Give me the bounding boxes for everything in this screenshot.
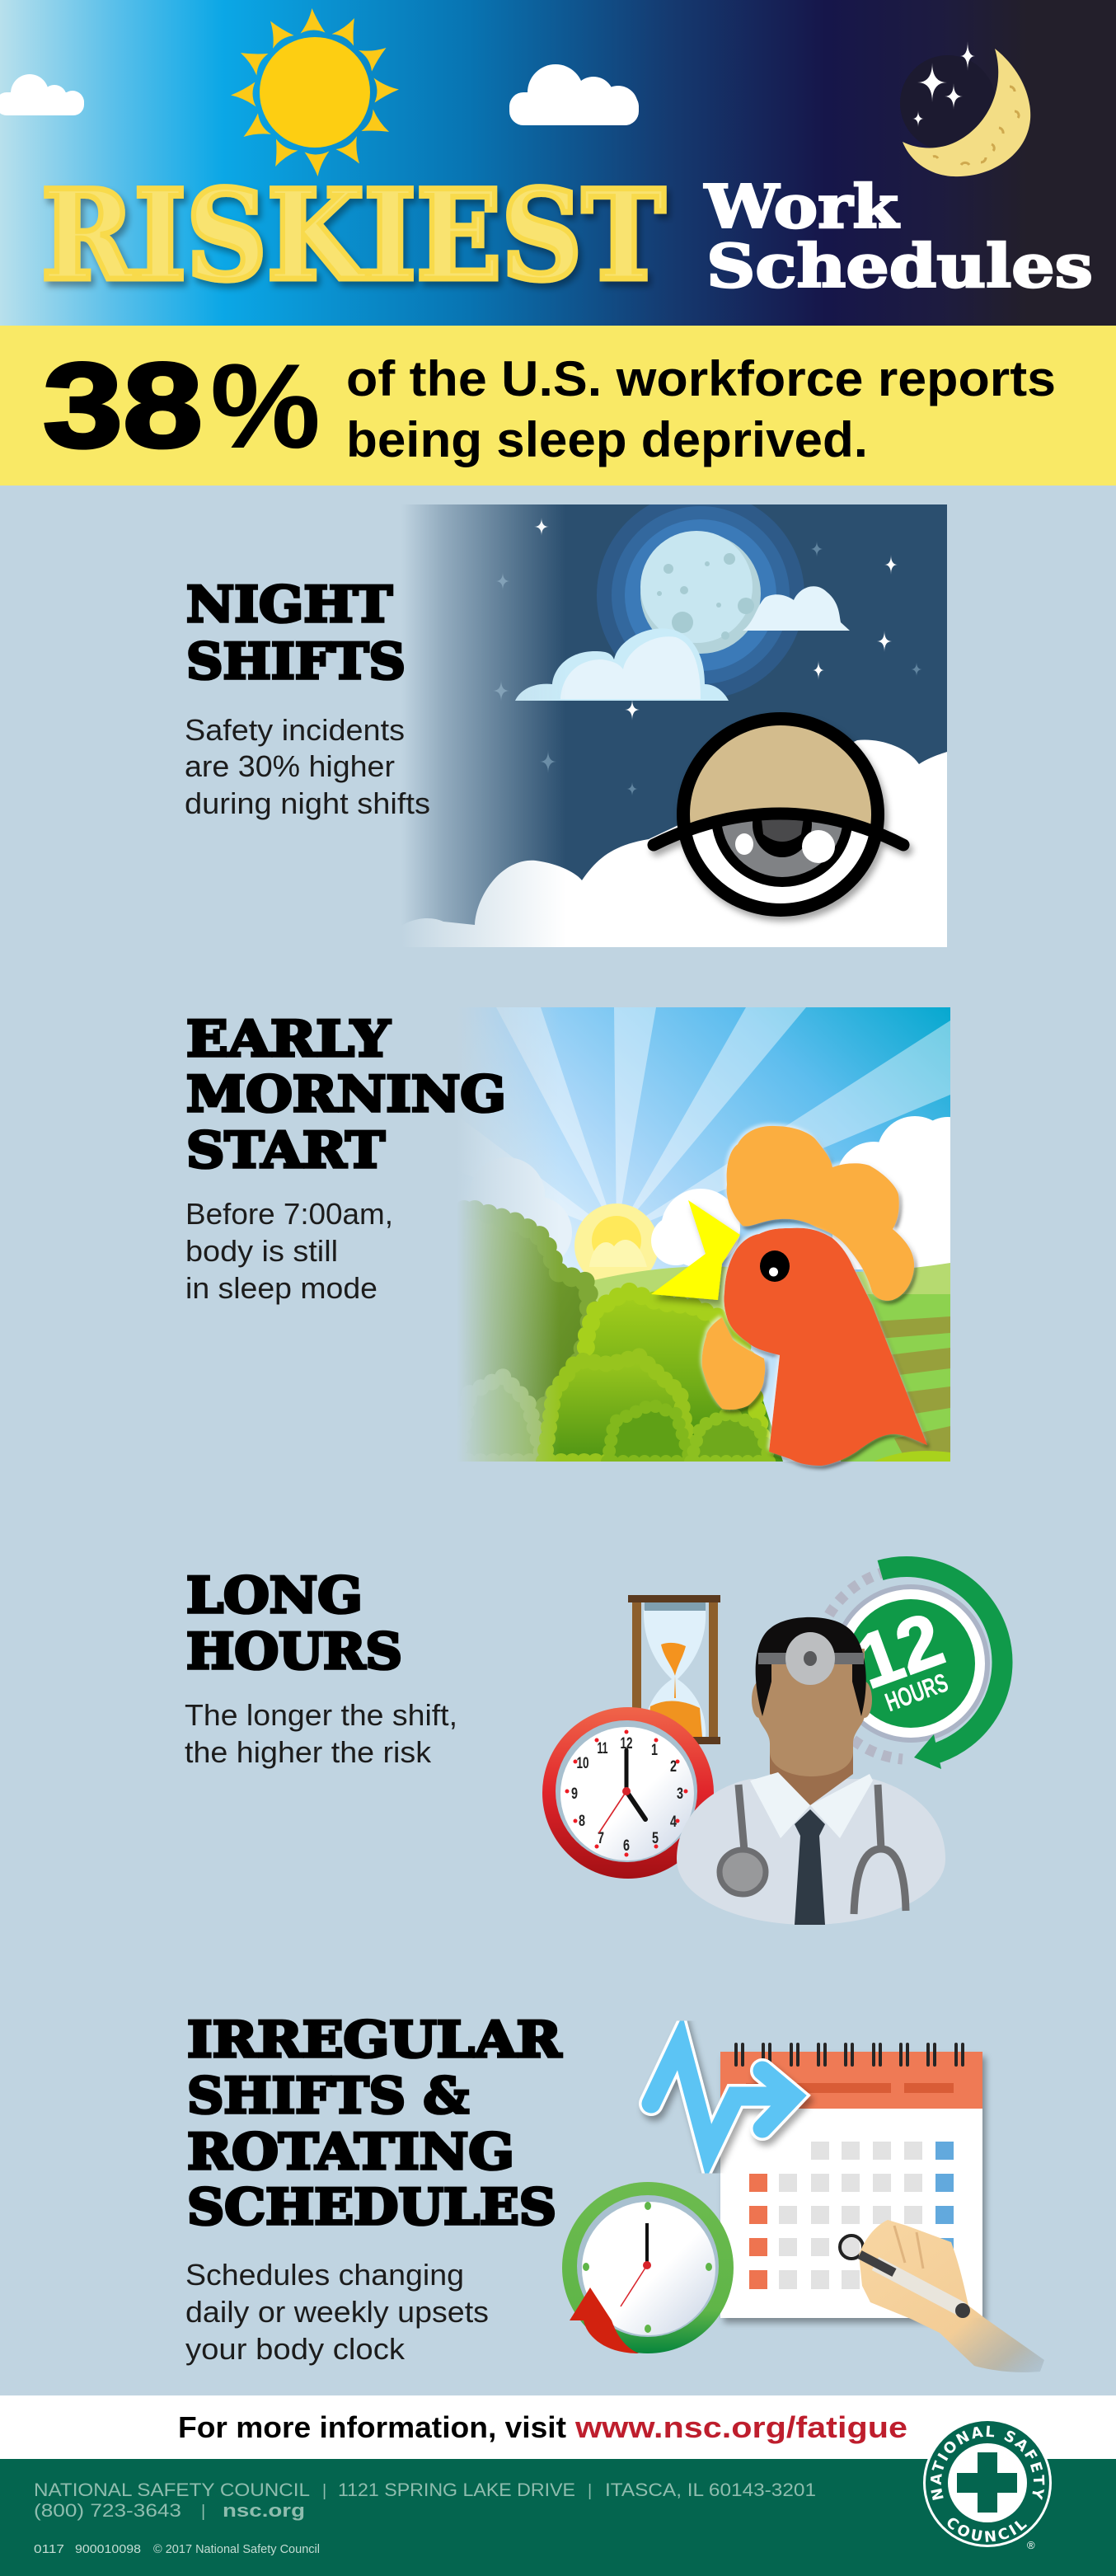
icon: zigzag arrow: [651, 2043, 793, 2151]
section: night shifts text: [185, 576, 430, 820]
bush: middle bright: [577, 1291, 767, 1462]
title: Work Schedules: Work: [704, 171, 900, 242]
heading: night shifts: SHIFTS: [186, 633, 406, 691]
icon: 12 hours badge: [815, 1566, 1002, 1769]
body: long hours: [185, 1698, 457, 1769]
stat number: [43, 338, 321, 473]
icon: red wall clock: [542, 1707, 714, 1879]
head mirror: [758, 1632, 864, 1685]
icon: red wall clock: 3: [677, 1785, 683, 1803]
doctor hair: [756, 1617, 866, 1716]
stat number: %: [210, 339, 321, 473]
heading: irregular shifts: SCHEDULES: [187, 2179, 556, 2236]
body: irregular shifts: your body clock: [185, 2332, 406, 2366]
section: long hours text: [185, 1567, 457, 1769]
cloud front left: [515, 628, 729, 701]
rooster eye: [760, 1250, 790, 1282]
icon: red wall clock: 6: [623, 1837, 630, 1855]
illustration: doctor with clocks: [542, 1566, 1002, 1925]
icon: calendar: [720, 2044, 982, 2318]
heading: irregular shifts: ROTATING: [187, 2123, 514, 2181]
footer contact text: nsc.org: [223, 2500, 305, 2521]
footer contact text: 0117: [34, 2542, 64, 2556]
heading: early morning start: MORNING: [186, 1066, 506, 1124]
icon: middle cloud: [509, 64, 639, 125]
body: early morning: in sleep mode: [185, 1271, 377, 1305]
rooster comb: [727, 1126, 914, 1301]
footer: [0, 2421, 1116, 2576]
icon: hourglass: [628, 1595, 720, 1744]
stat description: being sleep deprived.: [346, 412, 868, 467]
icon: left cloud: [0, 74, 84, 115]
logo: National Safety Council: ®: [1027, 2539, 1035, 2551]
heading: long hours: HOURS: [186, 1623, 402, 1681]
icon: red wall clock: 1: [651, 1742, 658, 1759]
more information band: For more information, visit: [178, 2410, 566, 2444]
heading: early morning start: START: [186, 1122, 385, 1180]
stat band: 38% sleep deprived: [0, 326, 1116, 486]
icon: 12 hours badge: 12: [846, 1597, 954, 1705]
stat description: [346, 351, 1056, 467]
footer contact text: © 2017 National Safety Council: [153, 2542, 320, 2556]
stethoscope: [720, 1785, 906, 1914]
red rotation arrow: [570, 2287, 639, 2353]
heading: early morning start: EARLY: [186, 1011, 391, 1068]
icon: 12 hours badge: HOURS: [881, 1668, 952, 1717]
illustration: night sky with sleepy eye: [401, 491, 947, 947]
doctor face: [758, 1649, 865, 1776]
body: night shifts: are 30% higher: [185, 749, 395, 783]
icon: sleepy eye: [654, 701, 903, 910]
body: early morning: [185, 1197, 393, 1305]
striped field: [841, 1294, 950, 1462]
foreground white clouds: [401, 739, 947, 947]
stars: [534, 518, 898, 720]
clouds: [651, 1116, 981, 1269]
footer contact text: [34, 2480, 816, 2556]
bush: centre: [544, 1356, 691, 1462]
body: night shifts: Safety incidents: [185, 713, 405, 747]
more information band: [0, 2395, 1116, 2459]
icon: red wall clock: 7: [598, 1830, 604, 1847]
sun rays: [490, 1007, 950, 1222]
icon: red wall clock: 12: [620, 1735, 633, 1753]
footer contact text: |: [201, 2503, 205, 2521]
title: Work Schedules: [704, 171, 1093, 301]
doctor neck: [770, 1739, 853, 1805]
heading: irregular shifts: SHIFTS &: [187, 2067, 469, 2125]
collar: [750, 1772, 873, 1838]
icon: sun: [231, 8, 399, 176]
icon: red wall clock: 9: [571, 1785, 578, 1803]
body: long hours: The longer the shift,: [185, 1698, 457, 1732]
body: long hours: the higher the risk: [185, 1735, 432, 1769]
footer contact text: 1121 SPRING LAKE DRIVE: [338, 2480, 575, 2500]
heading: early morning start: [186, 1011, 506, 1180]
body: early morning: Before 7:00am,: [185, 1197, 393, 1231]
body: early morning: body is still: [185, 1234, 338, 1268]
doctor ears: [752, 1682, 872, 1718]
rooster beak: [651, 1200, 740, 1300]
bush: far left: [457, 1210, 590, 1462]
heading: night shifts: NIGHT: [186, 576, 392, 634]
footer contact text: |: [588, 2482, 592, 2500]
body: night shifts: during night shifts: [185, 786, 430, 820]
footer contact text: ITASCA, IL 60143-3201: [605, 2480, 816, 2500]
body: irregular shifts: daily or weekly upsets: [185, 2295, 489, 2329]
title: Work Schedules: Schedules: [706, 231, 1093, 301]
title: RISKIEST: RISKIEST: [41, 163, 665, 308]
heading: night shifts: [186, 576, 406, 691]
icon: red wall clock: 5: [652, 1830, 659, 1847]
tie: [795, 1809, 825, 1925]
footer contact text: (800) 723-3643: [34, 2500, 181, 2521]
header banner: day to night sky: [0, 0, 1116, 326]
icon: hand with pen: [859, 2220, 1044, 2372]
heading: irregular shifts: IRREGULAR: [187, 2011, 562, 2069]
footer contact text: |: [322, 2482, 326, 2500]
footer contact text: 900010098: [75, 2542, 141, 2556]
sun: [574, 1204, 658, 1280]
logo: National Safety Council: NATIONAL SAFETY: [930, 2425, 1045, 2500]
icon: red wall clock: 8: [579, 1813, 585, 1830]
icon: crescent moon and stars: [900, 41, 1030, 176]
logo: National Safety Council: [923, 2421, 1052, 2551]
body: irregular shifts: [185, 2258, 489, 2366]
moon with halo: [597, 491, 804, 699]
bush: lower left: [472, 1368, 542, 1462]
cloud behind moon right: [743, 586, 850, 631]
logo: National Safety Council: COUNCIL: [948, 2517, 1027, 2542]
section: irregular shifts text: [185, 2011, 562, 2366]
icon: doctor: [677, 1617, 945, 1925]
more information band: www.nsc.org/fatigue: [574, 2410, 907, 2444]
bush: lower centre: [607, 1405, 691, 1462]
heading: irregular shifts: [187, 2011, 562, 2236]
left fade: [457, 1007, 560, 1462]
stat number: 38: [43, 338, 203, 472]
icon: rooster: [651, 1126, 927, 1466]
footer contact text: NATIONAL SAFETY COUNCIL: [34, 2480, 310, 2500]
rooster wattle: [702, 1317, 765, 1410]
rooster head: [724, 1228, 927, 1466]
icon: red wall clock: 4: [670, 1814, 677, 1831]
illustration: calendar with clock and hand: [562, 2043, 1044, 2372]
icon: red wall clock: 10: [577, 1755, 588, 1772]
heading: long hours: LONG: [186, 1567, 363, 1625]
calendar day grid: [779, 2142, 922, 2289]
doctor shirt: [677, 1779, 945, 1925]
icon: red wall clock: 2: [670, 1758, 677, 1776]
stat description: of the U.S. workforce reports: [346, 351, 1056, 406]
body: irregular shifts: Schedules changing: [185, 2258, 464, 2292]
hill: [593, 1263, 950, 1316]
illustration: sunrise farm with rooster: [445, 1007, 981, 1466]
bushes: dark base: [542, 1400, 783, 1462]
body: night shifts: [185, 713, 430, 820]
heading: long hours: [186, 1567, 402, 1681]
bush: lower right: [691, 1413, 771, 1462]
icon: red wall clock: 11: [597, 1740, 608, 1757]
section: early morning text: [185, 1011, 506, 1305]
icon: green clock: [562, 2182, 734, 2353]
left fade: [401, 504, 566, 947]
